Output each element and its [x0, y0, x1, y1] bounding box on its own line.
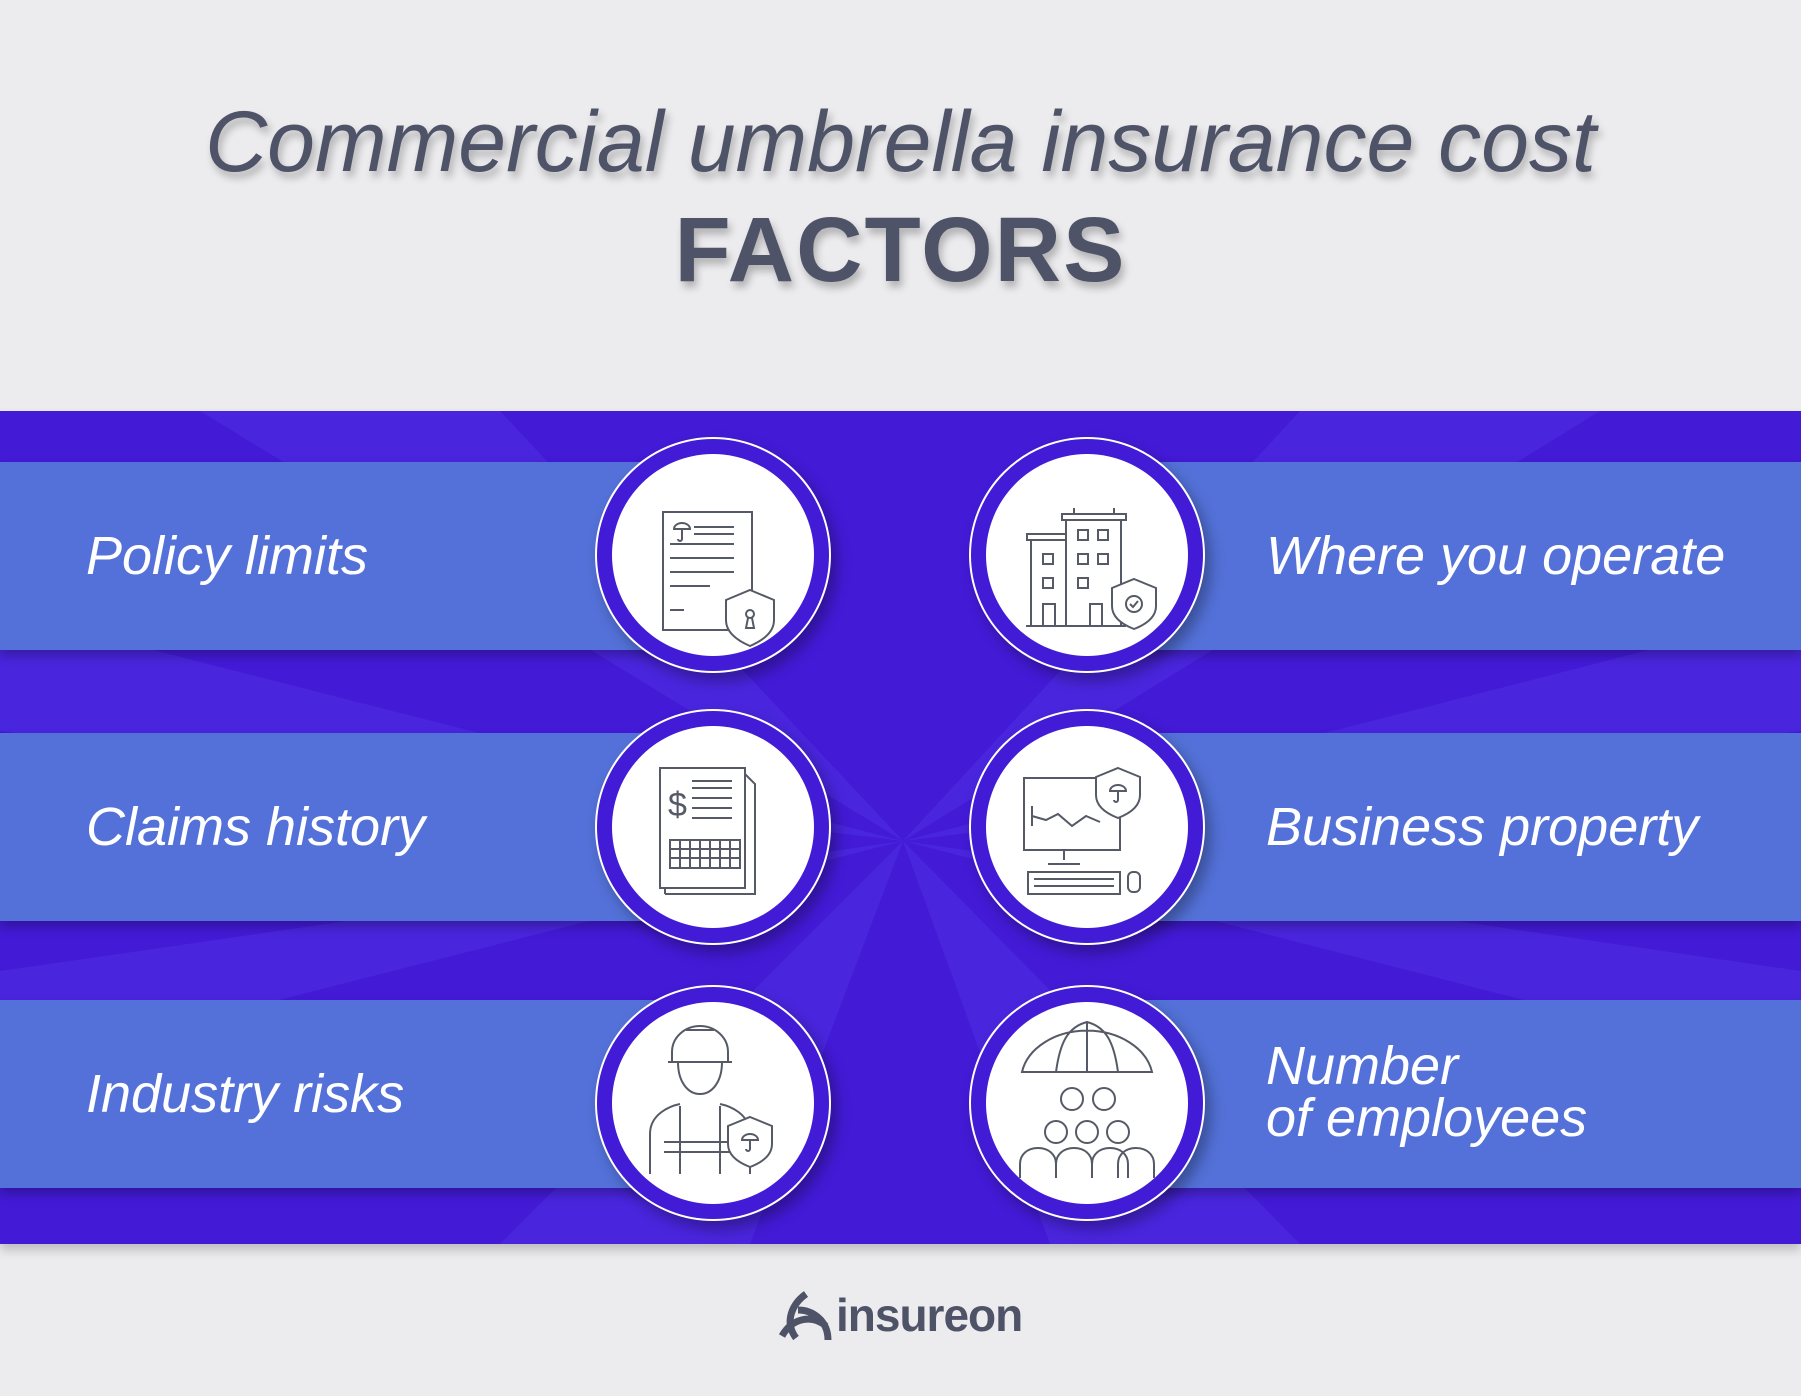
bar: business property	[1087, 733, 1801, 921]
bar: where you operate: Where you operate	[1266, 526, 1725, 586]
bar: where you operate	[1087, 462, 1801, 650]
title: Commercial umbrella insurance cost	[205, 94, 1596, 190]
icon: employees umbrella	[969, 985, 1205, 1221]
icon: buildings	[969, 437, 1205, 673]
logo: insureon: insureon	[836, 1289, 1022, 1341]
icon: computer	[969, 709, 1205, 945]
icon: policy document	[595, 437, 831, 673]
bar: industry risks: Industry risks	[86, 1064, 404, 1124]
bar: claims history: Claims history	[86, 797, 425, 857]
icon: claims report: $	[668, 786, 687, 824]
bar: industry risks	[0, 1000, 713, 1188]
bar: policy limits	[0, 462, 713, 650]
bar: claims history	[0, 733, 713, 921]
icon: worker	[595, 985, 831, 1221]
bar: number of employees	[1087, 1000, 1801, 1188]
panel: purple band	[0, 411, 1801, 1244]
icon: claims report	[595, 709, 831, 945]
bar: business property: Business property	[1266, 797, 1698, 857]
bar: number of employees: Number	[1266, 1036, 1458, 1096]
heading: factors: FACTORS	[675, 199, 1126, 301]
bar: number of employees: of employees	[1266, 1088, 1587, 1148]
bar: policy limits: Policy limits	[86, 526, 368, 586]
